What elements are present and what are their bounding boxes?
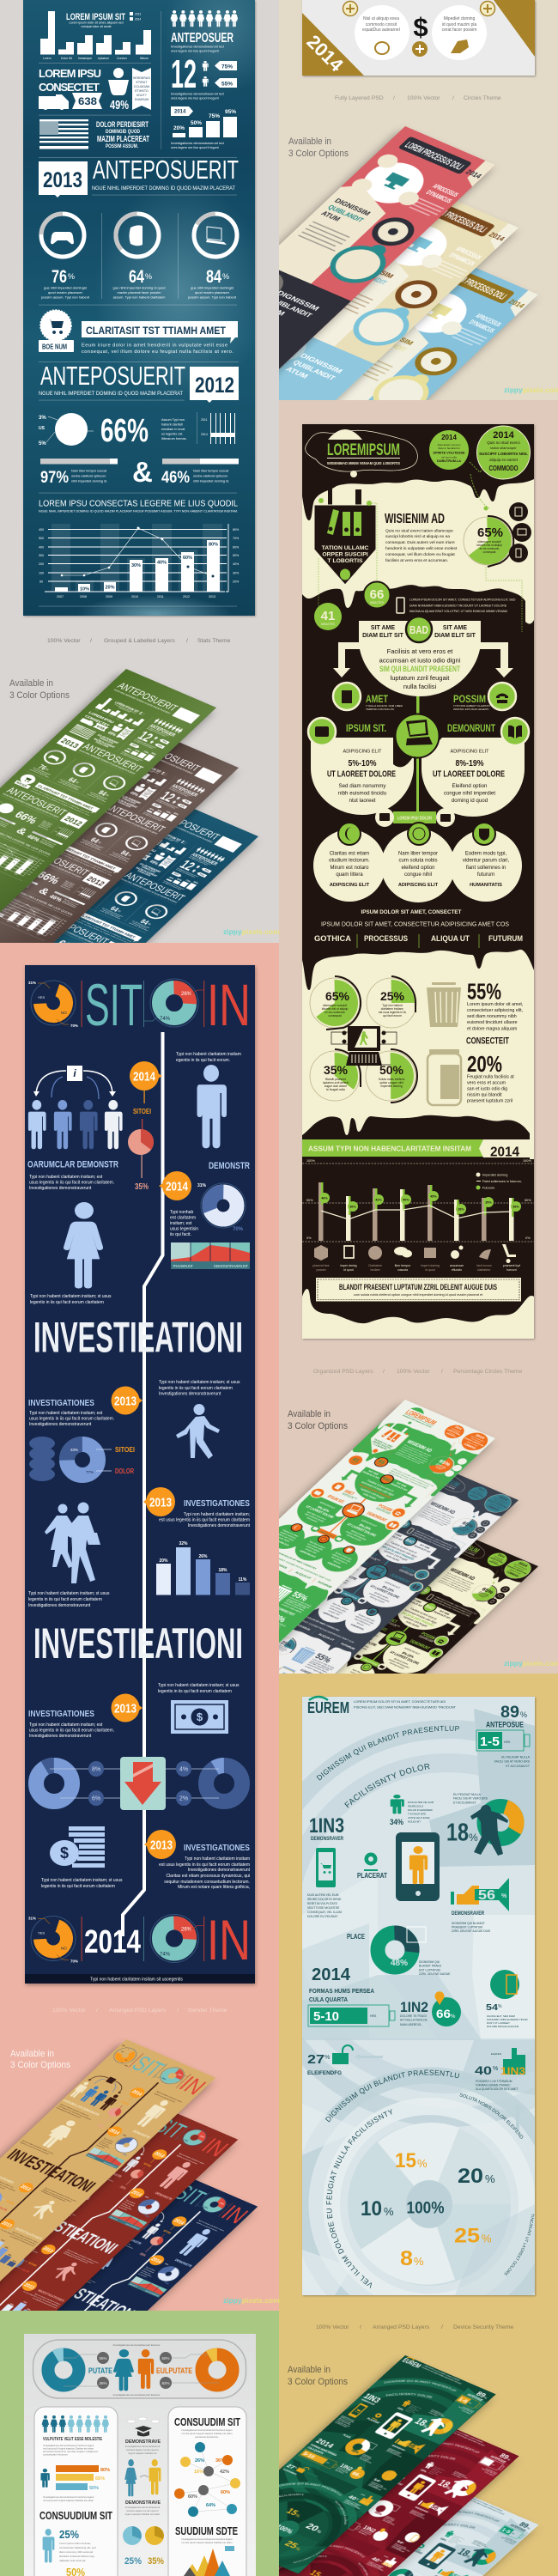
sub-panel: left column: tincidunt ut laoreet dolore mag	[59, 2555, 94, 2558]
caption: device security theme: Device Security Theme	[453, 2324, 513, 2330]
sub-panel: centre column: lectores legere me lius quod ii	[126, 2448, 159, 2451]
sub-panel: left column: processus dynamicus, qui sitte sequitur mutationem	[43, 2450, 99, 2453]
caption: circles theme: Circles Theme	[464, 95, 501, 101]
panel: circles theme infographic, cropped by page top: commodo consit	[366, 22, 397, 27]
caption: stats theme: /	[186, 638, 188, 644]
background: beige section	[279, 0, 558, 400]
sub-panel: left column: Lorem ipsum dolor sit amet,	[59, 2542, 91, 2545]
sub-panel: right column: 60%	[188, 2494, 197, 2500]
caption: gender theme: 100% Vector	[52, 2008, 86, 2014]
label: available options, circles: 3 Color Options	[288, 149, 349, 159]
label: available options, gender: 3 Color Options	[10, 2060, 70, 2070]
sub-panel: gender comparison: PUTATE	[88, 2366, 112, 2375]
label: available options, stats: Available in	[9, 678, 53, 689]
sub-panel: left column: consectetuer adipiscing elit, sed	[59, 2546, 96, 2549]
panel: circles theme infographic, cropped by page top: equatDus autearnel	[362, 27, 400, 33]
sub-panel: centre column: Investigationes demonstraverunt	[125, 2445, 160, 2448]
sub-panel: right column: 42%	[220, 2470, 229, 2475]
label: available options, device: 3 Color Options	[288, 2377, 348, 2387]
sub-panel: centre column: DEMONSTRAVE	[125, 2500, 161, 2506]
sub-panel: right column: 26%	[195, 2458, 204, 2464]
sub-panel: left column: VULPUTATE VELIT ESSE MOLESTIE	[43, 2437, 103, 2442]
caption: percentage circles theme: 100% Vector	[397, 1369, 430, 1375]
sub-panel: right column: 36%	[215, 2458, 225, 2464]
caption: device security theme: /	[360, 2324, 361, 2330]
background: grey section	[0, 0, 279, 943]
caption: circles theme: /	[452, 95, 454, 101]
sub-panel: right column: 64%	[206, 2503, 215, 2508]
caption: circles theme: 100% Vector	[407, 95, 440, 101]
sub-panel: gender comparison: 82%	[161, 2381, 170, 2385]
background: yellow section	[279, 1674, 558, 2576]
sub-panel: gender comparison	[33, 2340, 246, 2398]
label: available options, device: Available in	[288, 2365, 331, 2375]
sub-panel: centre column: lectores legere me lius quod ii	[126, 2509, 159, 2512]
caption: stats theme: /	[90, 638, 92, 644]
sub-panel: centre column: Investigationes demonstraverunt	[125, 2506, 160, 2509]
panel: circles theme infographic, cropped by page top: cerat facer possim	[442, 27, 476, 33]
watermark: zippypixels: zippypixels.com	[223, 927, 280, 936]
colour options stack: gender theme	[0, 2039, 258, 2311]
caption: gender theme: Arranged PSD Layers	[109, 2008, 167, 2014]
caption: device security theme: 100% Vector	[316, 2324, 349, 2330]
sub-panel: centre column: legunt saepius Claritas est etiam	[125, 2512, 161, 2516]
watermark: zippypixels: zippypixels.com	[223, 2296, 280, 2305]
caption: percentage circles theme: Percentage Circles Theme	[453, 1369, 523, 1375]
sub-panel: left column: Investigationes demonstraverunt lectores legere	[43, 2495, 94, 2499]
panel: navy gender infographic	[25, 965, 255, 1984]
sub-panel: left column: me lius quod ii legunt saepius Claritas est etiam	[43, 2499, 94, 2502]
sub-panel: gender comparison: 26%	[99, 2381, 107, 2385]
colour options stack: device theme	[279, 2355, 539, 2576]
colour options stack: percentage theme	[279, 426, 539, 1674]
caption: percentage circles theme: /	[441, 1369, 443, 1375]
sub-panel: left column: 50%	[89, 2486, 99, 2491]
caption: device security theme: /	[441, 2324, 443, 2330]
label: available options, circles	[288, 137, 349, 159]
sub-panel: centre column: 25%	[124, 2556, 142, 2567]
caption: percentage circles theme: /	[383, 1369, 385, 1375]
background: green section	[0, 2311, 279, 2576]
caption: stats theme: 100% Vector	[47, 638, 81, 644]
sub-panel: left column: CONSUUDIUM SIT	[39, 2509, 112, 2522]
panel: circles theme infographic, cropped by page top: id quod mazim pla	[442, 22, 477, 27]
sub-panel: right column: 60%	[221, 2490, 230, 2495]
sub-panel: gender comparison: 60%	[161, 2356, 170, 2360]
panel: dripping green percentage infographic	[302, 424, 534, 1339]
caption: gender theme: /	[96, 2008, 98, 2014]
caption: stats theme: Grouped & Labelled Layers	[104, 638, 175, 644]
sub-panel: right column: 16%	[194, 2470, 203, 2475]
panel: circles theme infographic, cropped by page top: Mipediet doming	[444, 16, 476, 21]
sub-panel: right column: me lius quod ii legunt saepius Claritas est etiam	[181, 2432, 233, 2435]
sub-panel: left column: 25%	[59, 2528, 79, 2541]
sub-panel: right column: processus dynamicus.	[195, 2435, 219, 2439]
caption: device security theme: Arranged PSD Layers	[373, 2324, 430, 2330]
sub-panel: right column: me lius quod ii legunt saepius Claritas est etiam	[181, 2541, 233, 2544]
caption: percentage circles theme: Organized PSD Layers	[313, 1369, 373, 1375]
panel: circles theme infographic, cropped by page top: $	[413, 12, 428, 42]
panel: circles theme infographic, cropped by page top	[302, 0, 535, 76]
label: available options, circles: Available in	[288, 137, 331, 147]
label: available options, stats: 3 Color Options	[9, 690, 70, 701]
colour options stack: circles theme	[279, 126, 538, 400]
label: available options, percentage: 3 Color Options	[288, 1421, 348, 1431]
sub-panel: right column	[168, 2407, 246, 2576]
panel: circles theme infographic, cropped by page top: Nisl ut aliquip exea	[363, 16, 399, 21]
caption: gender theme: Gender Theme	[188, 2008, 227, 2014]
label: available options, gender	[10, 2049, 70, 2070]
sub-panel: right column: Investigationes demonstraverunt lectores legere	[181, 2428, 233, 2432]
caption: gender theme: /	[177, 2008, 179, 2014]
sub-panel: right column: Investigationes demonstraverunt lectores legere	[181, 2537, 233, 2541]
label: available options, percentage	[288, 1409, 348, 1431]
sub-panel: gender comparison: EULPUTATE	[156, 2366, 192, 2375]
background: rose section	[279, 400, 558, 1674]
sub-panel: left column: diam nonummy nibh euismod	[59, 2550, 94, 2554]
label: available options, gender: Available in	[10, 2049, 54, 2059]
background: pink section	[0, 943, 279, 2311]
sub-panel: gender comparison: 55%	[99, 2356, 107, 2360]
label: available options, stats	[9, 678, 70, 701]
sub-panel: left column	[34, 2407, 118, 2576]
colour options stack: stats theme	[0, 669, 259, 943]
sub-panel: left column: 80%	[100, 2468, 110, 2473]
panel: grey people infographic, cropped by page bottom	[24, 2334, 256, 2576]
label: available options, device	[288, 2365, 348, 2387]
sub-panel: left column: Investigationes demonstraverunt lectores legere	[43, 2444, 94, 2447]
sub-panel: centre column: DEMONSTRAVE	[125, 2439, 161, 2445]
panel: blue stats infographic	[22, 0, 258, 618]
sub-panel: gender comparison: Investigationes demonstraverunt lectores	[113, 2343, 161, 2347]
sub-panel: left column: me lius quod ii legunt saepius Claritas est etiam	[43, 2447, 94, 2451]
caption: circles theme: /	[393, 95, 395, 101]
sub-panel: centre column: 35%	[148, 2556, 164, 2567]
sub-panel: centre column	[123, 2417, 164, 2567]
panel: circles theme infographic, cropped by page top: 2014	[302, 31, 348, 76]
sub-panel: left column: 65%	[95, 2476, 105, 2482]
caption: stats theme: Stats Theme	[197, 638, 231, 644]
sub-panel: gender comparison: Investigationes demonstraverunt lectores	[113, 2393, 161, 2397]
label: available options, percentage: Available in	[288, 1409, 331, 1419]
sub-panel: left column: consuetudium lectorum.	[43, 2452, 69, 2456]
sub-panel: centre column: legunt saepius Claritas est	[129, 2451, 157, 2455]
sub-panel: left column: naliquam erat volut pat.	[59, 2559, 86, 2562]
caption: circles theme: Fully Layered PSD	[335, 95, 384, 101]
